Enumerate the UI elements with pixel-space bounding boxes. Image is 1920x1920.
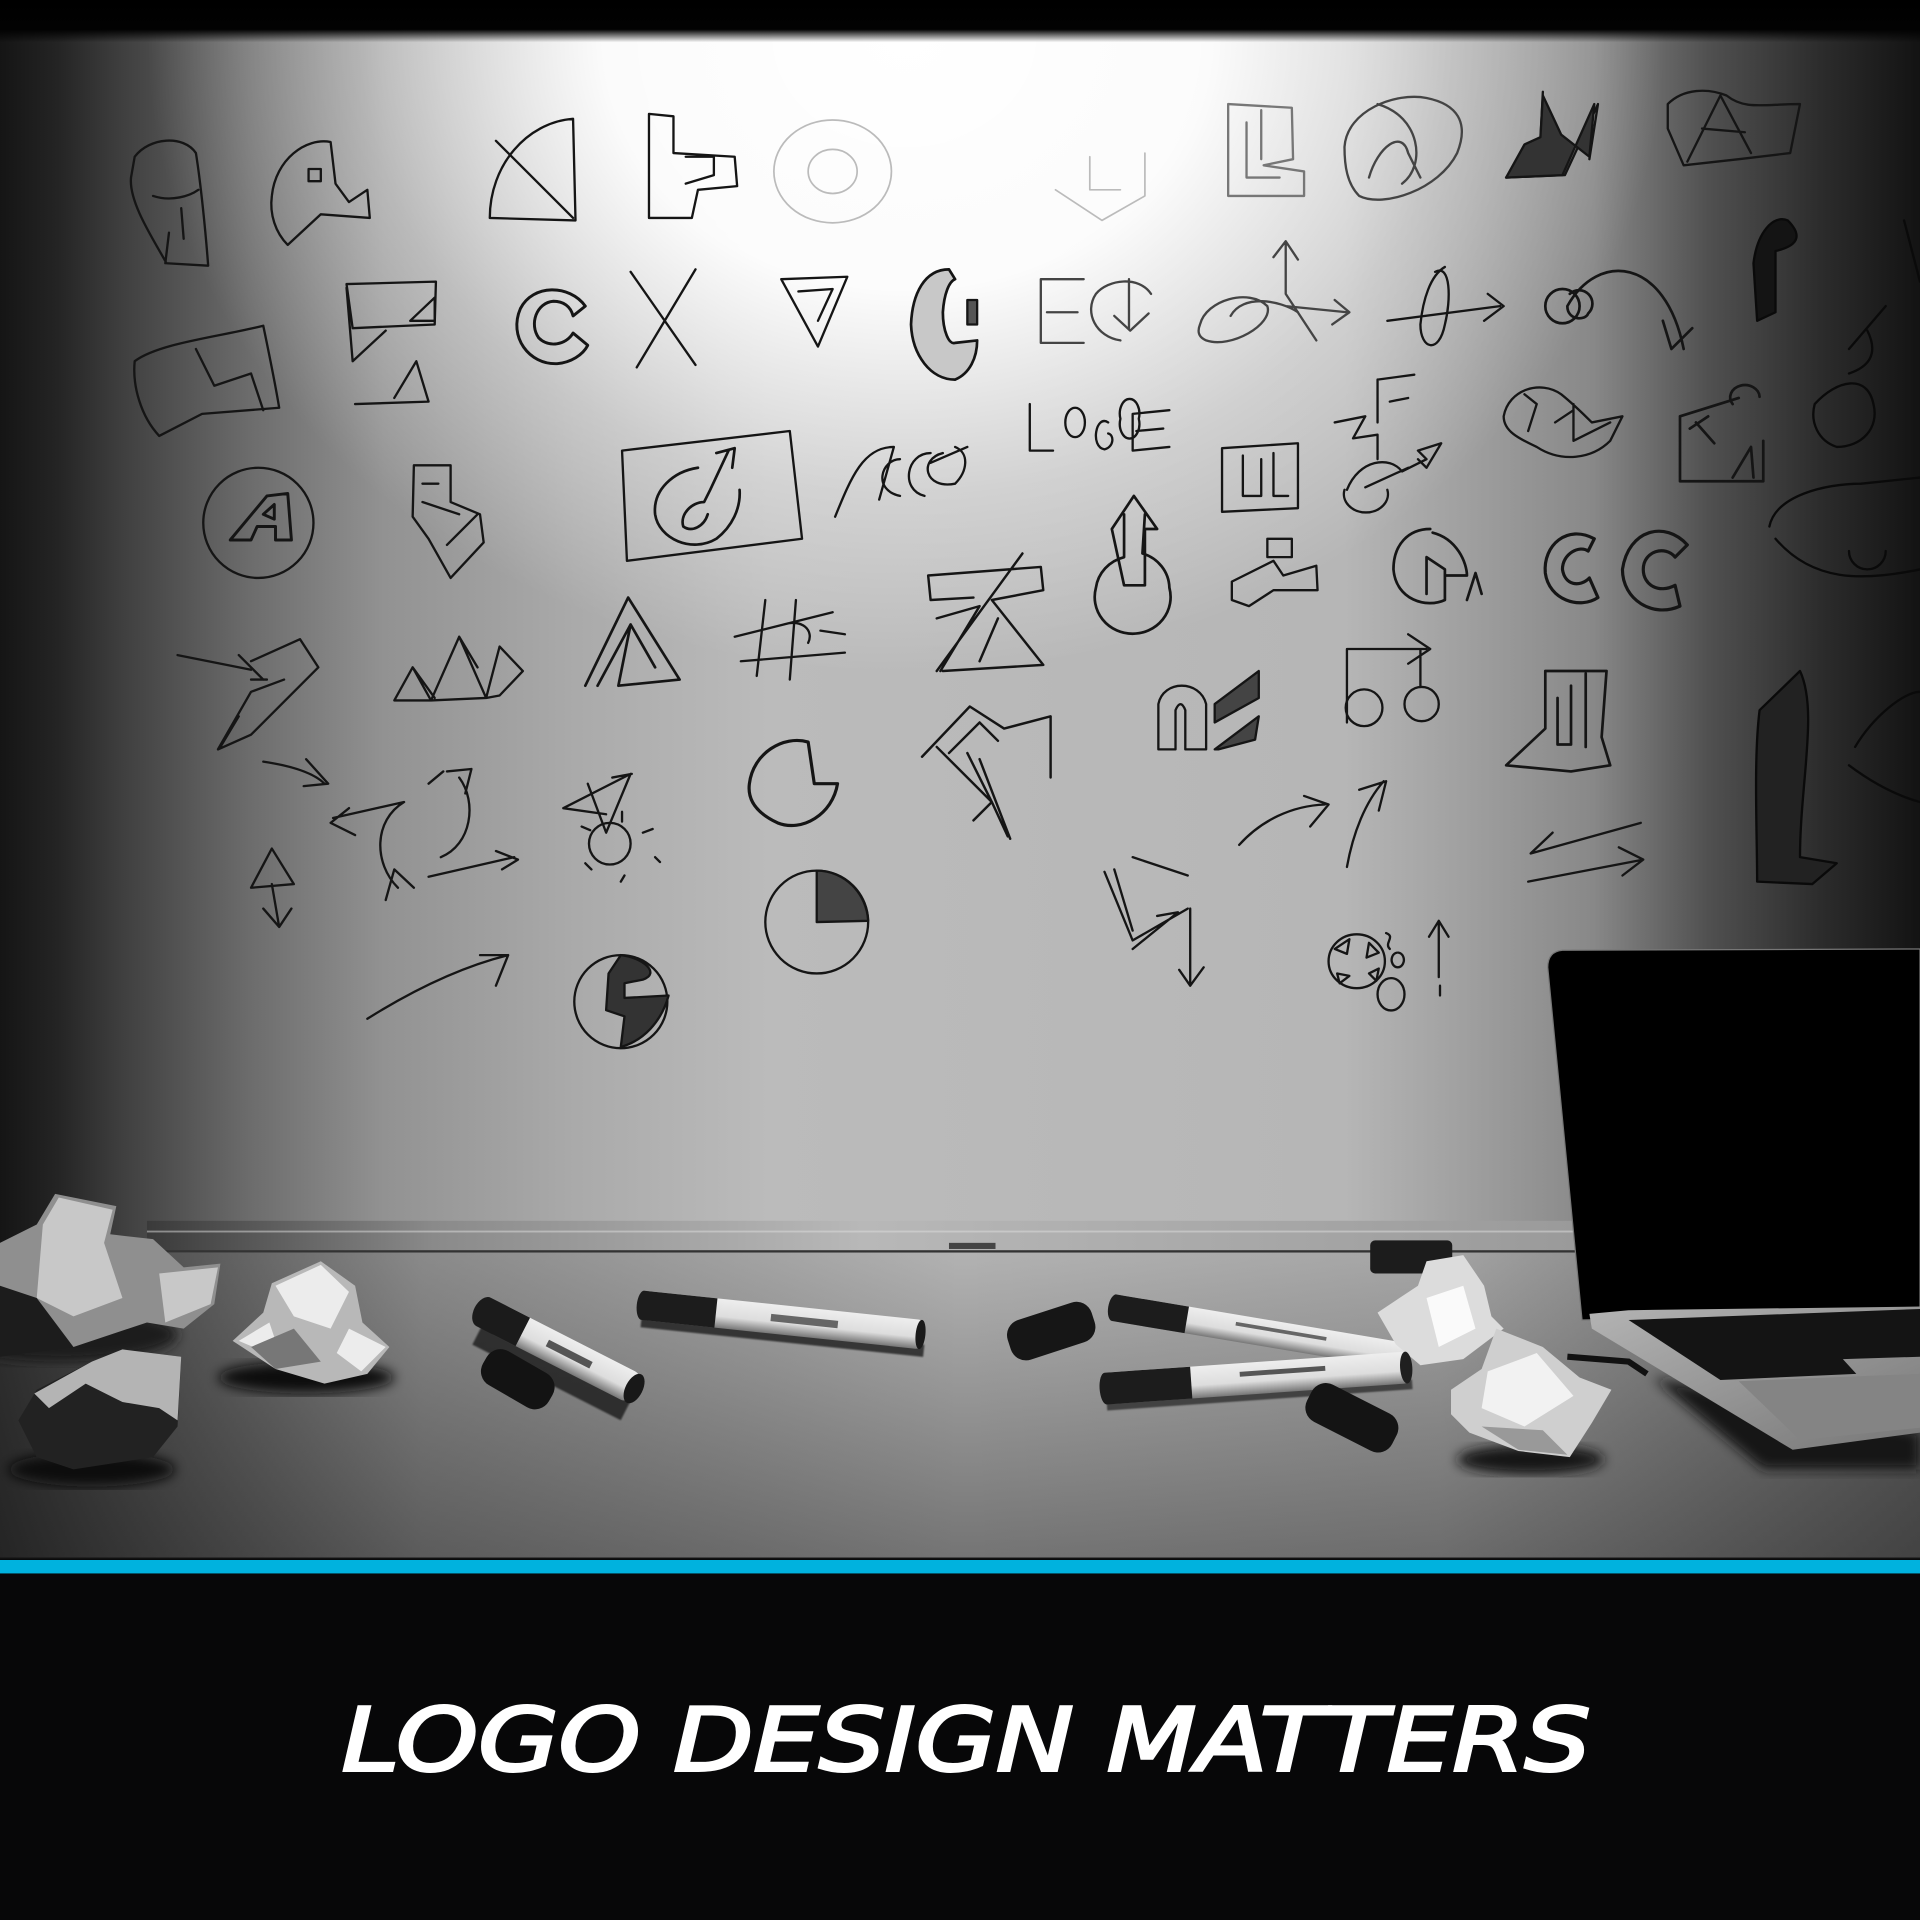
- laptop: [1548, 949, 1920, 1469]
- marker cap behind paper: [1370, 1240, 1452, 1273]
- crumpled paper: far left: [0, 1194, 220, 1362]
- laptop trackpad: [1739, 1374, 1920, 1440]
- title: LOGO DESIGN MATTERS: [342, 1690, 1591, 1792]
- laptop keyboard: [1629, 1309, 1920, 1380]
- whiteboard logo sketches: [131, 91, 1920, 1048]
- marker pen 3: [1106, 1293, 1406, 1370]
- laptop cable: [1567, 1357, 1647, 1374]
- marker cap 1: [475, 1343, 560, 1415]
- sketch row 4: [178, 496, 1687, 749]
- whiteboard rail: [147, 1221, 1580, 1253]
- sketch row 1: [131, 91, 1800, 266]
- marker pen 2: [634, 1290, 927, 1357]
- sketch row 3: [203, 375, 1763, 578]
- marker pen 1: [459, 1293, 649, 1423]
- laptop screen: [1548, 949, 1920, 1320]
- photo background: lit whiteboard wall: [0, 0, 1920, 1261]
- crumpled paper: lower left: [9, 1349, 181, 1487]
- laptop shadow: [1653, 1378, 1920, 1469]
- crumpled paper: right upper: [1378, 1255, 1504, 1365]
- blue divider bar: [0, 1558, 1920, 1559]
- dark sketches on right edge: [1753, 219, 1920, 884]
- marker cap 2: [1003, 1298, 1100, 1364]
- crumpled paper: centre-left: [218, 1261, 394, 1393]
- laptop base: [1589, 1307, 1920, 1450]
- table surface: [0, 1253, 1920, 1559]
- crumpled paper: right lower: [1451, 1329, 1611, 1474]
- sketch row 2: [134, 241, 1692, 436]
- marker pen 4: [1098, 1351, 1414, 1411]
- marker cap 3: [1300, 1378, 1404, 1458]
- sketch row 5: [251, 634, 1643, 927]
- black footer panel: [0, 1573, 1920, 1920]
- sketch row 6: [367, 857, 1449, 1048]
